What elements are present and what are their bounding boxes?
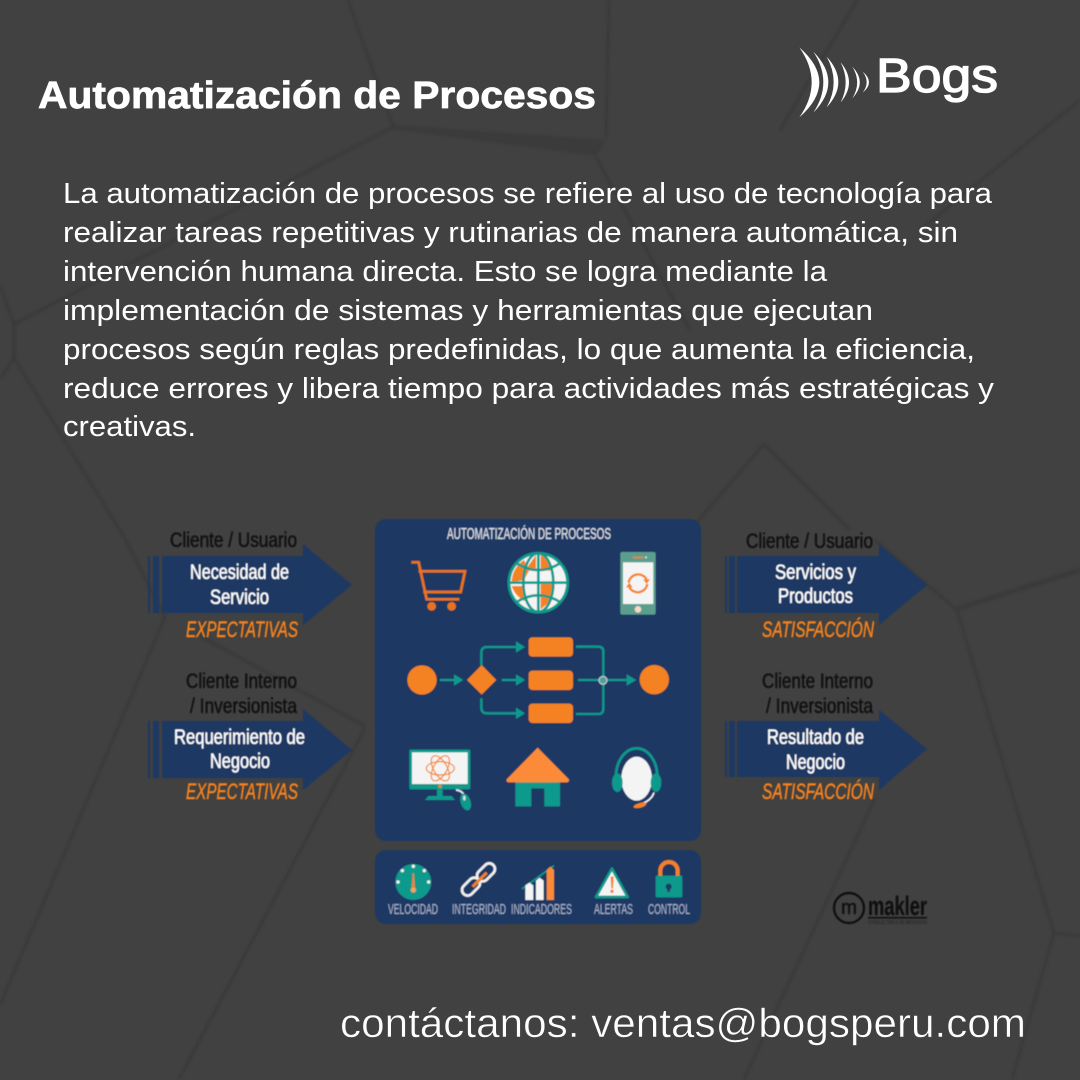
arrow: requerimiento de negocio: / Inversionista (190, 695, 297, 718)
panel: indicators (375, 850, 701, 924)
panel: right outputs (725, 530, 927, 804)
body paragraph: procesos según reglas predefinidas, lo que aumenta la eficiencia, (63, 334, 975, 366)
panel: left inputs (148, 529, 352, 804)
icon: control padlock (656, 862, 682, 897)
icon: house (507, 748, 569, 806)
body paragraph: La automatización de procesos se refiere al uso de tecnología para (63, 178, 993, 210)
flowchart (407, 637, 669, 723)
indicator labels: INTEGRIDAD (452, 902, 506, 918)
body paragraph: creativas. (63, 411, 196, 443)
arrow: resultado de negocio (725, 670, 927, 804)
body paragraph: reduce errores y libera tiempo para actividades más estratégicas y (63, 373, 995, 405)
arrow: resultado de negocio: Negocio (786, 751, 845, 774)
indicator labels: CONTROL (648, 902, 690, 918)
indicator labels: INDICADORES (511, 902, 572, 918)
body paragraph (63, 178, 995, 443)
icon: sound wave crescents (799, 47, 869, 117)
arrow: resultado de negocio: Cliente Interno (762, 670, 873, 693)
arrow: servicios y productos: Cliente / Usuario (746, 530, 873, 553)
icon: shopping cart (411, 562, 465, 609)
arrow: servicios y productos: SATISFACCIÓN (762, 617, 874, 642)
icon: indicadores bars (522, 866, 554, 900)
icon: smartphone (620, 552, 656, 615)
title: Automatización de Procesos (38, 75, 596, 117)
arrow: requerimiento de negocio: Cliente Interno (186, 670, 297, 693)
arrow: necesidad de servicio: EXPECTATIVAS (186, 617, 298, 642)
arrow: requerimiento de negocio: EXPECTATIVAS (186, 779, 298, 804)
arrow: necesidad de servicio: Necesidad de (190, 561, 289, 584)
indicator labels (388, 902, 690, 918)
arrow: necesidad de servicio: Cliente / Usuario (170, 529, 297, 552)
indicator labels: VELOCIDAD (388, 902, 438, 918)
arrow: requerimiento de negocio (148, 670, 352, 804)
arrow: resultado de negocio: SATISFACCIÓN (762, 779, 874, 804)
arrow: requerimiento de negocio: Requerimiento de (174, 726, 305, 749)
icon: monitor with atom (409, 750, 473, 812)
footer contact: contáctanos: ventas@bogsperu.com (340, 1000, 1026, 1046)
chart: process automation diagram (148, 519, 928, 926)
icon: alertas triangle (596, 869, 628, 897)
icon: globe (509, 553, 568, 612)
arrow: servicios y productos (725, 530, 927, 642)
arrow: requerimiento de negocio: Negocio (210, 750, 270, 773)
arrow: servicios y productos: Productos (778, 585, 853, 608)
logo wordmark: Bogs (876, 50, 998, 103)
arrow: servicios y productos: Servicios y (775, 561, 856, 584)
body paragraph: implementación de sistemas y herramientas que ejecutan (63, 295, 873, 327)
indicator labels: ALERTAS (594, 902, 633, 918)
arrow: necesidad de servicio: Servicio (210, 586, 269, 609)
arrow: resultado de negocio: / Inversionista (766, 695, 873, 718)
icon: integridad link (460, 861, 497, 898)
logo: makler: m (841, 897, 857, 919)
panel: central process (375, 519, 701, 841)
icon: velocidad gauge (395, 864, 431, 900)
logo: makler: CONSULTORES DE NEGOCIOS (868, 920, 928, 926)
logo: makler (834, 891, 928, 926)
arrow: resultado de negocio: Resultado de (767, 726, 864, 749)
icon: headset (612, 748, 661, 809)
body paragraph: intervención humana directa. Esto se logra mediante la (63, 256, 828, 288)
body paragraph: realizar tareas repetitivas y rutinarias de manera automática, sin (63, 217, 958, 249)
logo: Bogs (799, 47, 998, 117)
logo: makler: makler (868, 891, 927, 921)
panel heading: AUTOMATIZACIÓN DE PROCESOS (447, 526, 611, 543)
arrow: necesidad de servicio (148, 529, 352, 642)
